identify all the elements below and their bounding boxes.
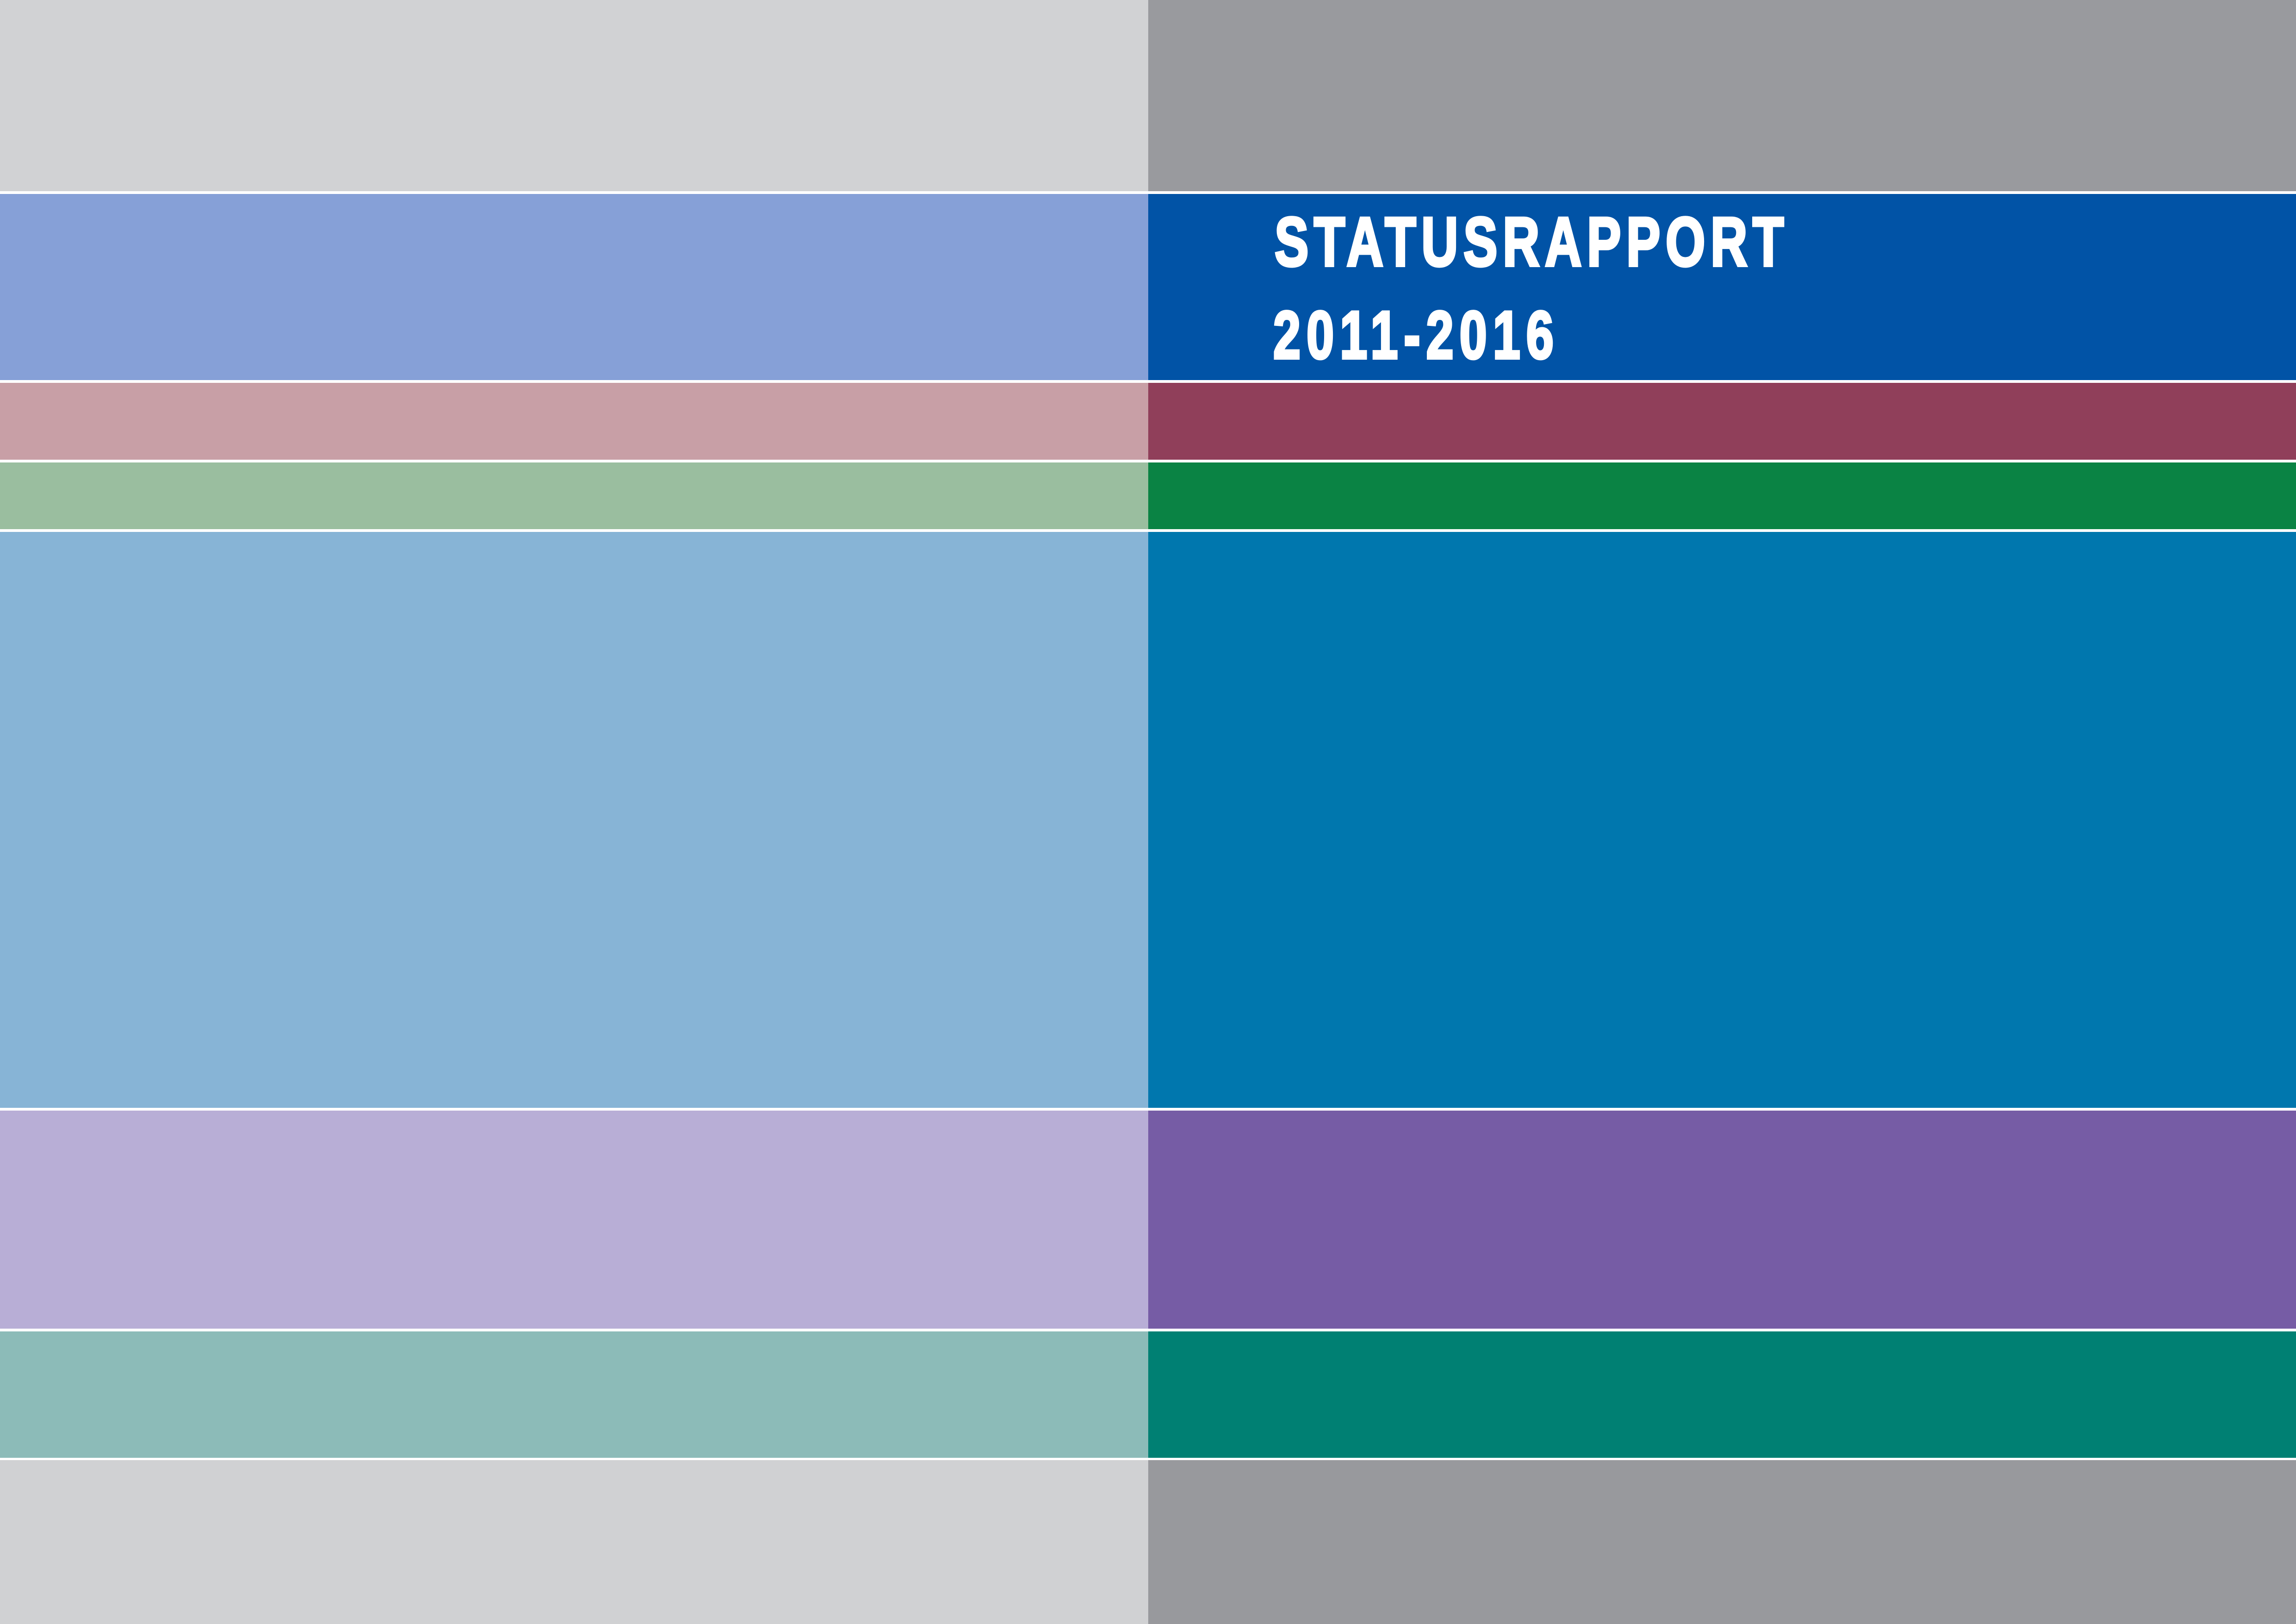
band: purple — [0, 1111, 2296, 1329]
band: bottom grey — [0, 1460, 2296, 1624]
band: maroon — [0, 383, 2296, 460]
title line: STATUSRAPPORT: STATUSRAPPORT — [1275, 203, 1789, 281]
band: large blue — [0, 532, 2296, 1108]
band: blue title band — [0, 194, 2296, 380]
title line: years: 2011-2016 — [1273, 298, 1560, 373]
band: green — [0, 462, 2296, 529]
band: teal — [0, 1331, 2296, 1458]
band: top grey — [0, 0, 2296, 191]
title: Statusrapport 2011-2016 — [1273, 203, 1789, 373]
